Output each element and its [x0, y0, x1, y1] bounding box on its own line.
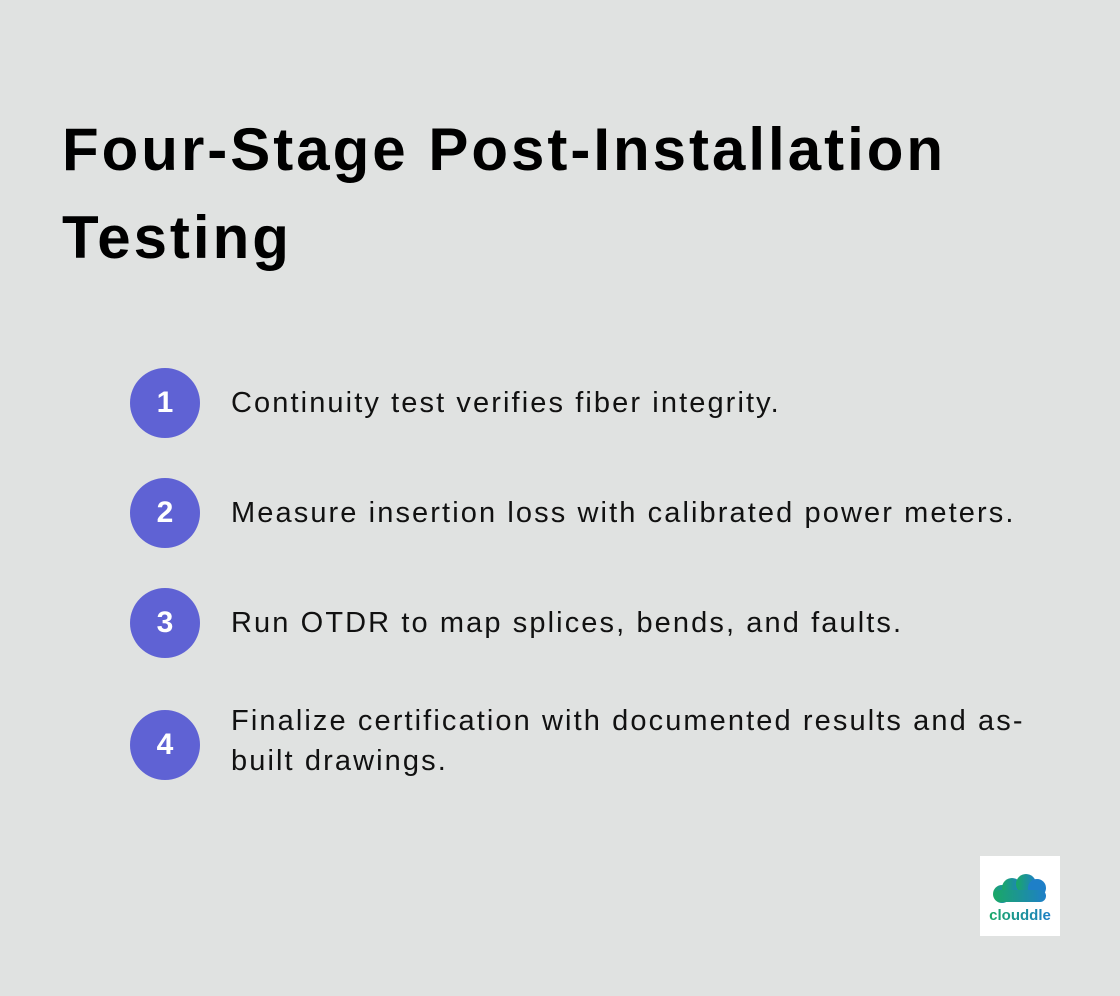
text: Measure insertion loss with calibrated power meters.: [231, 497, 1016, 529]
text: Run OTDR to map splices, bends, and faults.: [231, 607, 903, 639]
logo: clouddle: [989, 907, 1051, 924]
title: [62, 116, 946, 271]
title: Testing: [62, 204, 292, 271]
logo: [980, 856, 1060, 936]
text: 3: [157, 606, 173, 639]
text: Finalize certification with documented results and as-: [231, 705, 1025, 737]
step 3: [130, 588, 903, 658]
text: 1: [157, 386, 173, 419]
step 4: [130, 705, 1025, 780]
text: 4: [157, 728, 173, 761]
step 1: [130, 368, 781, 438]
text: Continuity test verifies fiber integrity.: [231, 387, 781, 419]
title: Four-Stage Post-Installation: [62, 116, 946, 183]
text: built drawings.: [231, 745, 448, 777]
step 2: [130, 478, 1016, 548]
text: 2: [157, 496, 173, 529]
